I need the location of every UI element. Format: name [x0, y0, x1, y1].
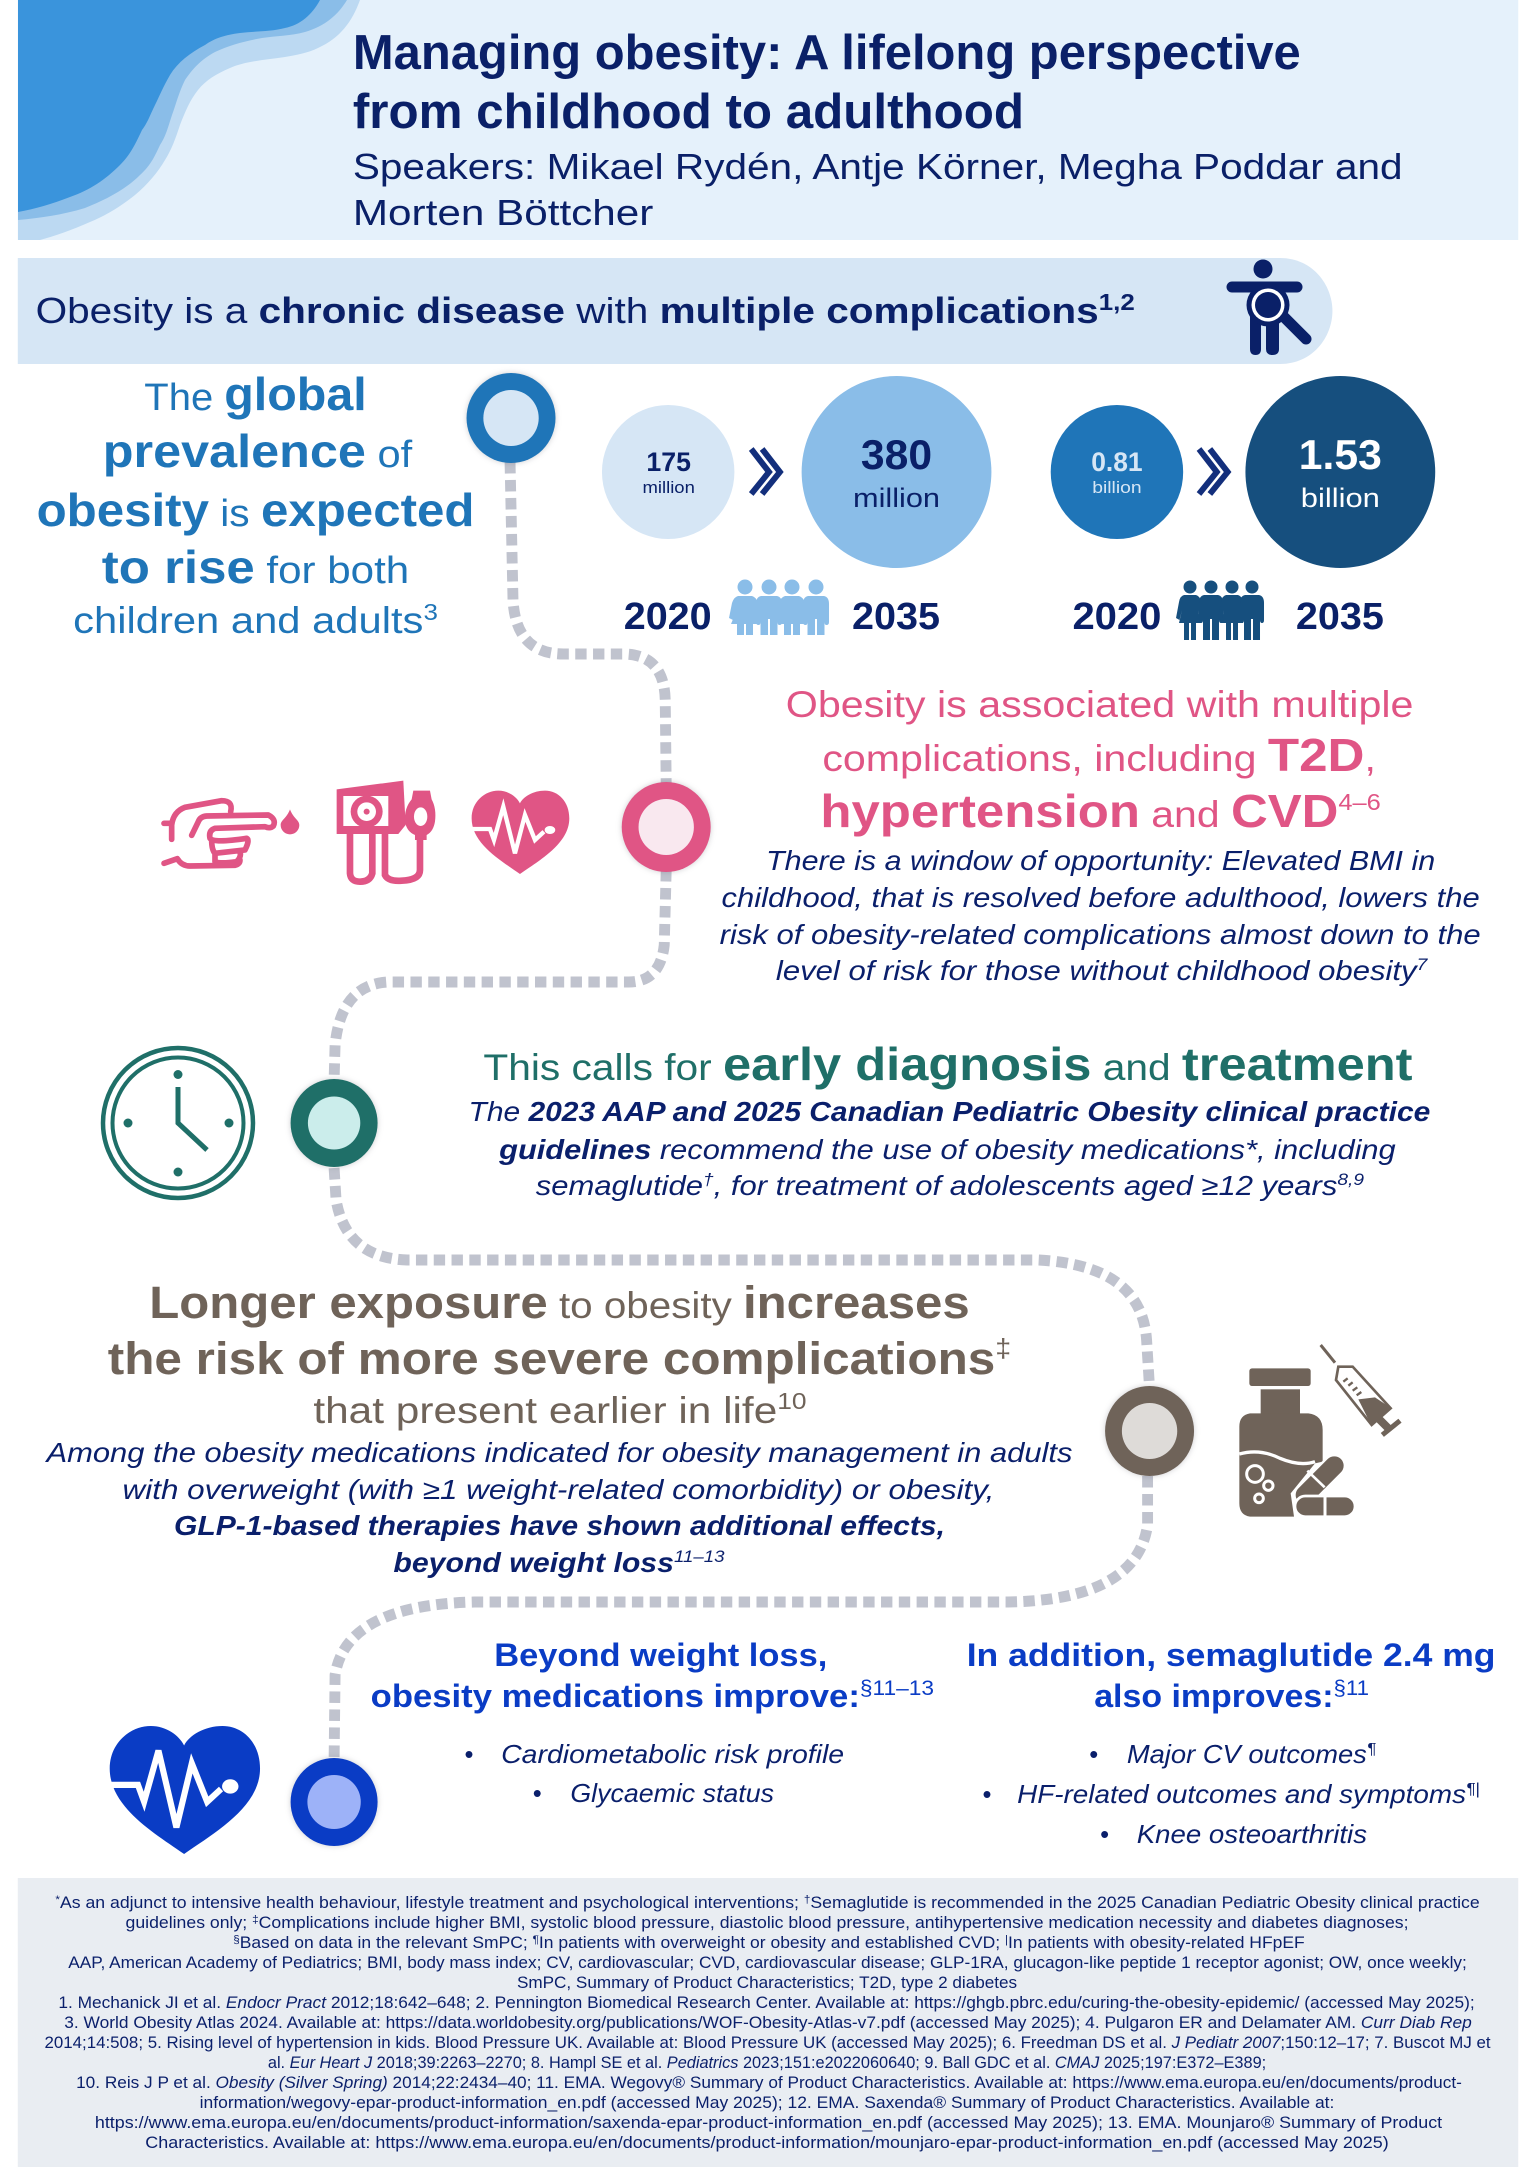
title: from childhood to adulthood — [353, 85, 1024, 139]
column heading: obesity medications improve: — [371, 1678, 817, 1714]
bullet list: • — [983, 1781, 992, 1809]
section 2 body — [720, 845, 1481, 986]
year labels: 2035 — [852, 596, 940, 638]
banner text: Obesity is a chronic disease with multiple complications — [36, 291, 1045, 331]
abbreviations: AAP, American Academy of Pediatrics; BMI, body mass index; CV, cardiovascular; CVD, cardiovascular disease; GLP-1RA, glucagon-like peptide 1 receptor agonist; OW, once weekly; — [68, 1954, 1467, 1972]
section 1: global prevalence heading: The global — [144, 369, 367, 420]
section 3 body: The 2023 AAP and 2025 Canadian Pediatric Obesity clinical practice — [469, 1096, 1430, 1127]
footnotes: * — [55, 1894, 61, 1906]
icon: blood pressure cuff — [337, 781, 435, 882]
footnotes: guidelines only; — [126, 1914, 238, 1932]
title — [353, 26, 1301, 139]
header wave: light layer — [18, 0, 360, 240]
footnotes — [55, 1894, 1480, 1952]
arrow: adults chevrons — [1199, 449, 1228, 494]
section 4 body: 11–13 — [674, 1547, 725, 1566]
references: Characteristics. Available at: https://www.ema.europa.eu/en/documents/product-information/mounjaro-epar-product-information_en.pdf (accessed May 2025) — [145, 2134, 1389, 2152]
references: 2014;14:508; 5. Rising level of hypertension in kids. Blood Pressure UK. Available at: Blood Pressure UK (accessed May 2025); 6. Freedman DS et al. J Pediatr 2007;150:12–17; 7. Buscot MJ et — [44, 2034, 1491, 2052]
banner text: 1,2 — [1099, 289, 1135, 315]
abbreviations — [68, 1954, 1467, 1992]
stat: children 175 million 2020: 175 — [646, 447, 691, 477]
section 4 body: beyond weight loss — [393, 1547, 646, 1578]
footnotes: § — [233, 1934, 240, 1946]
bullet list: • — [533, 1780, 542, 1808]
header wave: middle layer — [18, 0, 347, 220]
section 2 body: There is a window of opportunity: Elevated BMI in — [766, 845, 1435, 876]
bullet list: • — [1100, 1821, 1109, 1849]
bullet list — [983, 1741, 1480, 1849]
references: al. Eur Heart J 2018;39:2263–2270; 8. Hampl SE et al. Pediatrics 2023;151:e2022060640; 9. Ball GDC et al. CMAJ 2025;197:E372–E389; — [268, 2054, 1266, 2072]
section 4 body: with overweight (with ≥1 weight-related comorbidity) or obesity, — [123, 1474, 994, 1505]
section 2 body: level of risk for those without childhood obesity — [776, 955, 1336, 986]
bullet list: ¶| — [1466, 1781, 1480, 1798]
section 3 body: semaglutide — [536, 1170, 682, 1201]
icon: heart with pulse — [472, 791, 569, 874]
icon: person with magnifier — [1232, 260, 1306, 355]
icon: blue heart with pulse — [110, 1726, 260, 1854]
footnotes: | — [1005, 1934, 1008, 1946]
section 2 heading — [786, 684, 1413, 837]
references: https://www.ema.europa.eu/en/documents/product-information/saxenda-epar-product-information_en.pdf (accessed May 2025); 13. EMA. Mounjaro® Summary of Product — [95, 2114, 1443, 2132]
bullet list: HF-related outcomes and symptoms — [1017, 1781, 1431, 1809]
section 3 body: guidelines recommend the use of obesity medications*, including — [498, 1134, 1396, 1165]
section 2 heading: hypertension and CVD — [820, 786, 1327, 837]
references: 1. Mechanick JI et al. Endocr Pract 2012;18:642–648; 2. Pennington Biomedical Research Center. Available at: https://ghgb.pbrc.edu/curing-the-obesity-epidemic/ (accessed May 2025); — [58, 1994, 1475, 2012]
section 4 heading — [108, 1278, 1011, 1431]
section 2 body: childhood, that is resolved before adulthood, lowers the — [722, 882, 1480, 913]
bullet list: • — [1089, 1741, 1098, 1769]
section 1: global prevalence heading — [37, 369, 474, 641]
speakers — [353, 147, 1403, 233]
stat: adults 0.81 billion 2020: billion — [1092, 478, 1142, 497]
stat: adults 1.53 billion 2035: 1.53 — [1299, 431, 1382, 478]
footnotes: Complications include higher BMI, systolic blood pressure, diastolic blood pressure, antihypertensive medication necessity and diabetes diagnoses; — [259, 1914, 1409, 1932]
column heading — [967, 1637, 1496, 1714]
title: Managing obesity: A lifelong perspective — [353, 26, 1301, 80]
year labels: 2035 — [1296, 596, 1384, 638]
year labels — [624, 596, 1384, 638]
references: 3. World Obesity Atlas 2024. Available at: https://data.worldobesity.org/publications/WOF-Obesity-Atlas-v7.pdf (accessed May 2025); 4. Pulgaron ER and Delamater AM. Curr Diab Rep — [64, 2014, 1472, 2032]
section 4 body: GLP-1-based therapies have shown additional effects, — [174, 1510, 945, 1541]
stat: children 380 million 2035: million — [853, 483, 940, 513]
column heading: Beyond weight loss, — [494, 1637, 827, 1673]
bullet list: • — [465, 1741, 474, 1769]
references: 10. Reis J P et al. Obesity (Silver Spring) 2014;22:2434–40; 11. EMA. Wegovy® Summary of Product Characteristics. Available at: https://www.ema.europa.eu/en/documents/product- — [76, 2074, 1462, 2092]
footnotes: In patients with overweight or obesity and established CVD; — [539, 1934, 1005, 1952]
section 3 body: † — [703, 1170, 714, 1189]
section 3 body: 8,9 — [1337, 1170, 1365, 1189]
year labels: 2020 — [1072, 596, 1161, 638]
footer panel — [18, 1878, 1518, 2167]
section 4 heading: the risk of more severe complications — [108, 1334, 906, 1384]
stat: adults 0.81 billion 2020: 0.81 — [1091, 447, 1143, 477]
section 2 body: risk of obesity-related complications almost down to the — [720, 919, 1481, 950]
section 2 icons: complications — [164, 781, 569, 882]
section 2 heading: Obesity is associated with multiple — [786, 684, 1413, 725]
column: semaglutide — [967, 1637, 1496, 1849]
bullet list: Cardiometabolic risk profile — [501, 1741, 844, 1769]
footnotes: As an adjunct to intensive health behaviour, lifestyle treatment and psychological interventions; — [60, 1894, 804, 1912]
section 2 heading: complications, including T2D , — [822, 730, 1376, 781]
footnotes: In patients with obesity-related HFpEF — [1008, 1934, 1305, 1952]
header wave: dark layer — [18, 0, 320, 212]
section 3 body — [469, 1096, 1430, 1201]
footnotes: ‡ — [252, 1914, 259, 1926]
footnotes: † — [804, 1894, 810, 1906]
node 1 — [467, 373, 556, 463]
section 3 heading: This calls for early diagnosis and treatment — [483, 1039, 1412, 1090]
section 2 heading: 4–6 — [1338, 789, 1381, 815]
speakers: Speakers: Mikael Rydén, Antje Körner, Megha Poddar and — [353, 147, 1403, 187]
stat: adults 1.53 billion 2035: billion — [1301, 483, 1380, 513]
bottle and pills — [1239, 1368, 1355, 1518]
column heading: In addition, semaglutide 2.4 mg — [967, 1637, 1496, 1673]
icon: medication bottle and syringe — [1239, 1345, 1400, 1518]
section 1: global prevalence heading: obesity is expected — [37, 485, 474, 536]
section 4 heading: that present earlier in life — [313, 1390, 714, 1431]
column heading: §11 — [1334, 1677, 1369, 1700]
stat: adults 0.81 billion 2020 — [1051, 405, 1183, 539]
syringe — [1321, 1345, 1400, 1435]
speakers: Morten Böttcher — [353, 193, 653, 233]
references: information/wegovy-epar-product-information_en.pdf (accessed May 2025); 12. EMA. Saxenda® Summary of Product Characteristics. Available at: — [200, 2094, 1334, 2112]
section 1: global prevalence heading: to rise for both — [102, 542, 409, 593]
section 4 heading: ‡ — [995, 1335, 1011, 1363]
column heading: §11–13 — [860, 1677, 934, 1700]
year labels: 2020 — [624, 596, 712, 638]
bullet list: Major CV outcomes — [1127, 1741, 1352, 1769]
bullet list: Knee osteoarthritis — [1137, 1821, 1367, 1849]
section 4 heading: Longer exposure to obesity increases — [149, 1278, 970, 1328]
icon: clock — [103, 1048, 253, 1198]
section 1: global prevalence heading: prevalence of — [103, 426, 413, 477]
bullet list: ¶ — [1367, 1741, 1376, 1758]
section 4 heading: 10 — [777, 1388, 807, 1414]
section 1: global prevalence heading: children and adults — [73, 600, 380, 641]
column heading — [371, 1637, 934, 1714]
arrow: children chevrons — [751, 449, 780, 494]
section 1: global prevalence heading: 3 — [423, 599, 438, 625]
bullet list — [465, 1741, 844, 1808]
abbreviations: SmPC, Summary of Product Characteristics; T2D, type 2 diabetes — [517, 1974, 1017, 1992]
bullet list: Glycaemic status — [570, 1780, 774, 1808]
node 3 — [291, 1079, 378, 1167]
footnotes: ¶ — [533, 1934, 539, 1946]
node 4 — [1105, 1386, 1194, 1476]
stat: children 175 million 2020: million — [642, 478, 695, 497]
stat: children 175 million 2020 — [602, 405, 734, 539]
footnotes: Semaglutide is recommended in the 2025 Canadian Pediatric Obesity clinical practice — [810, 1894, 1480, 1912]
section 3 body: , for treatment of adolescents aged ≥12 years — [714, 1170, 1338, 1201]
references — [44, 1994, 1491, 2152]
section 4 body — [44, 1437, 1073, 1578]
stat: children 380 million 2035: 380 — [861, 431, 932, 478]
dashed journey path — [334, 462, 1150, 1760]
header panel — [18, 0, 1518, 240]
banner: chronic disease — [18, 258, 1332, 364]
stat: adults 1.53 billion 2035 — [1245, 376, 1435, 568]
icon: adult group — [1176, 580, 1264, 640]
stat: children 380 million 2035 — [802, 376, 991, 568]
section 4 body: Among the obesity medications indicated for obesity management in adults — [44, 1437, 1073, 1468]
section 2 body: 7 — [1417, 955, 1428, 974]
footnotes: Based on data in the relevant SmPC; — [240, 1934, 533, 1952]
icon: children group — [729, 580, 829, 635]
column: beyond weight loss — [371, 1637, 934, 1808]
node 2 — [622, 782, 711, 872]
column heading: also improves: — [1094, 1678, 1317, 1714]
node 5 — [291, 1758, 378, 1846]
icon: finger prick — [164, 801, 299, 866]
